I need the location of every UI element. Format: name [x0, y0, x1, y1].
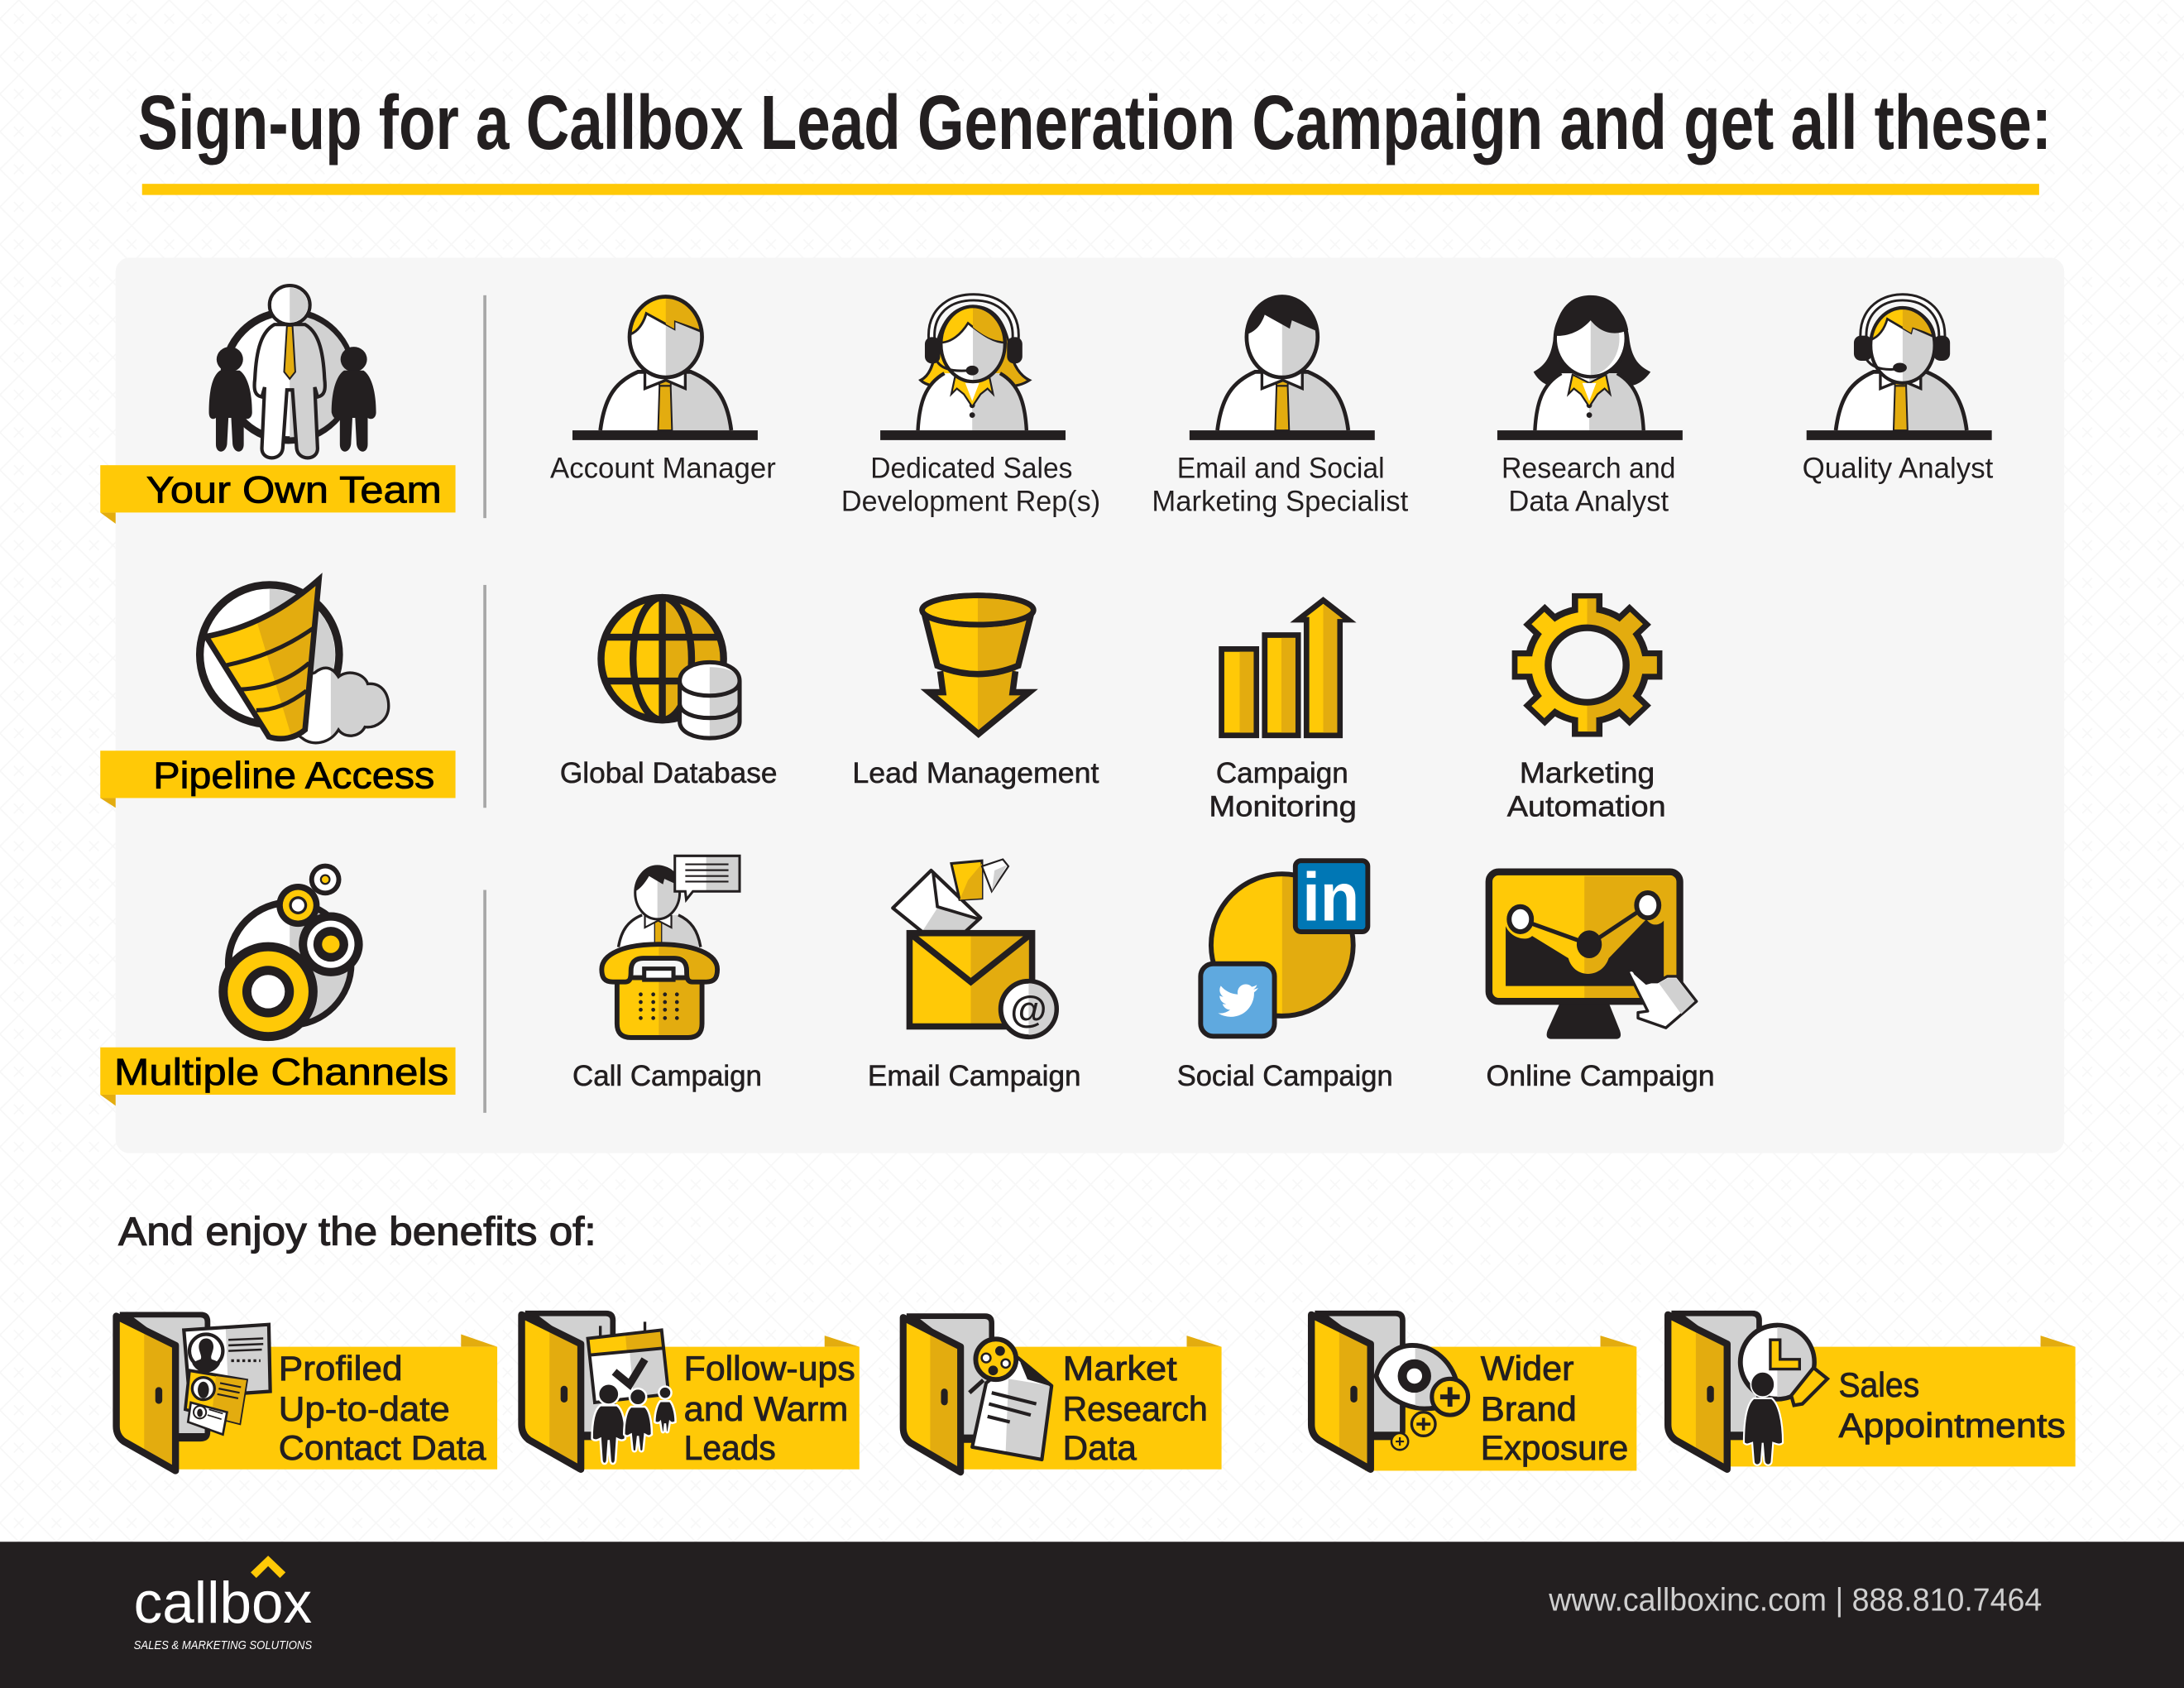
- logo: callbox: SALES & MARKETING SOLUTIONS: [134, 1639, 313, 1652]
- benefit: Wider Brand Exposure: Brand: [1481, 1389, 1577, 1428]
- benefit: Wider Brand Exposure: Exposure: [1481, 1428, 1628, 1467]
- benefit: Follow-ups and Warm Leads: Leads: [684, 1428, 776, 1467]
- icon: contact cards: [184, 1325, 271, 1435]
- label: Account Manager: Account Manager: [550, 452, 776, 484]
- icon: marketing automation gear: [1512, 593, 1662, 737]
- logo: callbox: callbox: [134, 1570, 312, 1635]
- icon: pipeline funnel: [200, 579, 389, 743]
- contact details: www.callboxinc.com | 888.810.7464: [1548, 1583, 2042, 1618]
- benefit: Wider Brand Exposure: [1311, 1311, 1636, 1470]
- icon: campaign monitoring chart: [1222, 600, 1348, 736]
- icon: eye with plus signs: [1376, 1345, 1468, 1450]
- panel: services: [100, 257, 2064, 1153]
- label: Campaign Monitoring: Monitoring: [1209, 790, 1357, 822]
- benefit: Follow-ups and Warm Leads: [522, 1311, 860, 1470]
- label: Campaign Monitoring: [1209, 757, 1357, 822]
- icon: call campaign: [601, 856, 740, 1038]
- icon: social campaign: [1200, 860, 1367, 1036]
- label: Marketing Automation: Automation: [1507, 790, 1666, 822]
- label: Quality Analyst: Quality Analyst: [1803, 452, 1994, 484]
- icon: calendar and people: [588, 1321, 676, 1464]
- benefit: Profiled Up-to-date Contact Data: [117, 1312, 497, 1470]
- benefit: Wider Brand Exposure: Wider: [1481, 1349, 1574, 1388]
- divider: row 1: [483, 295, 486, 518]
- title underline: [142, 184, 2039, 195]
- label: Lead Management: Lead Management: [852, 757, 1099, 789]
- label: Dedicated Sales Development Rep(s): [841, 452, 1100, 518]
- label: Social Campaign: Social Campaign: [1177, 1060, 1393, 1092]
- icon: multiple channels: [218, 864, 363, 1041]
- icon: email campaign: @: [1010, 988, 1047, 1030]
- icon: clock, pencil and person: [1741, 1326, 1827, 1465]
- ribbon: Multiple Channels: [100, 1048, 456, 1105]
- benefit: Sales Appointments: Sales: [1838, 1365, 1919, 1404]
- label: Research and Data Analyst: Data Analyst: [1508, 486, 1669, 518]
- logo: callbox: [134, 1556, 313, 1652]
- label: Dedicated Sales Development Rep(s): Development Rep(s): [841, 486, 1100, 518]
- footer: [0, 1542, 2184, 1688]
- benefit: Sales Appointments: [1668, 1311, 2076, 1470]
- benefit: Follow-ups and Warm Leads: and Warm: [684, 1389, 848, 1428]
- icon: quality analyst: [1807, 297, 1992, 440]
- label: Call Campaign: Call Campaign: [572, 1060, 762, 1092]
- ribbon: Multiple Channels: Multiple Channels: [114, 1051, 448, 1093]
- label: Email and Social Marketing Specialist: [1152, 452, 1408, 518]
- icon: research and data analyst: [1497, 295, 1683, 440]
- icon: email and social specialist: [1190, 297, 1375, 440]
- icon: global database: [601, 597, 740, 738]
- icon: magnifier and document: [970, 1339, 1051, 1460]
- label: Research and Data Analyst: [1502, 452, 1675, 518]
- ribbon: Pipeline Access: [100, 750, 456, 808]
- benefit: Market Research Data: [903, 1313, 1222, 1472]
- benefit: Profiled Up-to-date Contact Data: Contact Data: [279, 1428, 486, 1467]
- label: Marketing Automation: [1507, 757, 1666, 822]
- ribbon: Pipeline Access: Pipeline Access: [153, 755, 434, 797]
- icon: dedicated sales rep: [880, 297, 1066, 440]
- icon: online campaign: [1489, 872, 1697, 1039]
- benefit: Market Research Data: Market: [1063, 1349, 1177, 1388]
- label: Email and Social Marketing Specialist: Marketing Specialist: [1152, 486, 1408, 518]
- label: Email Campaign: Email Campaign: [868, 1060, 1081, 1092]
- ribbon: Your Own Team: Your Own Team: [146, 469, 442, 511]
- benefit: Follow-ups and Warm Leads: Follow-ups: [684, 1349, 855, 1388]
- label: Campaign Monitoring: Campaign: [1216, 757, 1348, 789]
- label: Global Database: Global Database: [560, 757, 777, 789]
- icon: account manager: [572, 297, 758, 440]
- benefit: Market Research Data: Data: [1063, 1428, 1137, 1467]
- benefit: Sales Appointments: Appointments: [1838, 1406, 2066, 1445]
- benefit: Market Research Data: Research: [1063, 1389, 1208, 1428]
- label: Marketing Automation: Marketing: [1520, 757, 1655, 789]
- label: Online Campaign: Online Campaign: [1486, 1060, 1715, 1092]
- icon: social campaign: in: [1302, 860, 1359, 936]
- label: Research and Data Analyst: Research and: [1502, 452, 1675, 484]
- label: Email and Social Marketing Specialist: Email and Social: [1177, 452, 1385, 484]
- icon: lead management funnel: [922, 596, 1033, 736]
- icon: team: [209, 285, 376, 458]
- heading: benefits: And enjoy the benefits of:: [118, 1211, 596, 1254]
- benefit: Profiled Up-to-date Contact Data: Up-to-date: [279, 1389, 450, 1428]
- benefit: Profiled Up-to-date Contact Data: Profiled: [279, 1349, 403, 1388]
- divider: row 2: [483, 585, 486, 808]
- ribbon: Your Own Team: [100, 465, 456, 524]
- icon: email campaign: [893, 860, 1056, 1037]
- divider: row 3: [483, 890, 486, 1113]
- label: Dedicated Sales Development Rep(s): Dedicated Sales: [870, 452, 1072, 484]
